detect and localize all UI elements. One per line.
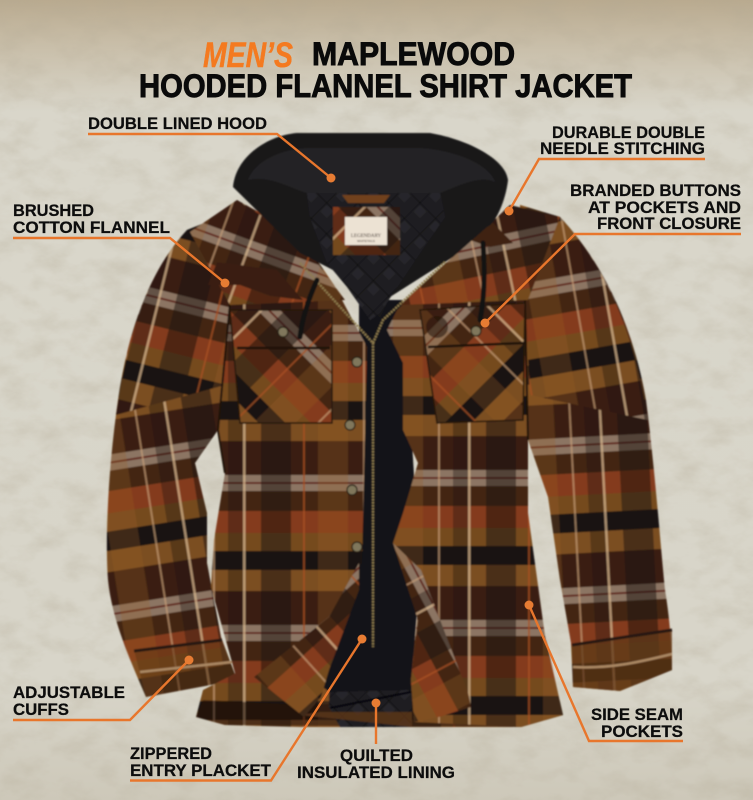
callout: zippered entry placket: ENTRY PLACKET xyxy=(130,761,272,780)
right sleeve xyxy=(520,205,672,691)
callout: adjustable cuffs: ADJUSTABLE xyxy=(13,683,125,702)
collars xyxy=(208,217,513,300)
neck label patch: WHITETAILS xyxy=(357,239,375,243)
callout: double lined hood: DOUBLE LINED HOOD xyxy=(88,114,267,133)
left front panel xyxy=(211,200,367,717)
jacket lower hem xyxy=(196,640,563,727)
right pocket xyxy=(420,303,525,423)
neck label patch xyxy=(333,195,400,255)
callout: durable double needle stitching: DURABLE DOUBLE xyxy=(552,123,705,142)
hood xyxy=(233,133,508,318)
callout: double lined hood xyxy=(88,114,336,182)
callout: adjustable cuffs: CUFFS xyxy=(13,700,69,719)
callout: branded buttons: FRONT CLOSURE xyxy=(597,214,741,233)
neck label patch: LEGENDARY xyxy=(351,234,382,239)
callout: side seam pockets: POCKETS xyxy=(601,722,683,741)
quilted lining xyxy=(307,193,445,320)
callout: quilted insulated lining: INSULATED LINING xyxy=(297,763,455,782)
yoke right xyxy=(400,205,560,305)
callout: branded buttons: BRANDED BUTTONS xyxy=(570,181,741,200)
inner dark panel xyxy=(300,300,420,727)
callout: zippered entry placket: ZIPPERED xyxy=(130,744,212,763)
title xyxy=(139,36,632,104)
callout: side seam pockets xyxy=(524,600,683,741)
title: MEN’S xyxy=(203,36,293,75)
callout: branded buttons: AT POCKETS AND xyxy=(588,198,741,217)
callout: brushed cotton flannel: BRUSHED xyxy=(13,201,94,220)
callout: adjustable cuffs xyxy=(13,656,194,720)
title: HOODED FLANNEL SHIRT JACKET xyxy=(139,68,632,104)
drawstrings xyxy=(300,243,484,337)
callout: zippered entry placket xyxy=(130,634,366,780)
callout: durable double needle stitching xyxy=(504,123,705,216)
callout: brushed cotton flannel: COTTON FLANNEL xyxy=(13,218,170,237)
callout: durable double needle stitching: NEEDLE STITCHING xyxy=(540,139,705,158)
yoke left xyxy=(190,200,345,305)
callout: side seam pockets: SIDE SEAM xyxy=(591,705,683,724)
left pocket xyxy=(230,310,332,423)
right front panel xyxy=(387,205,563,727)
callout: quilted insulated lining: QUILTED xyxy=(340,746,413,765)
callout: brushed cotton flannel xyxy=(13,201,230,288)
callout: quilted insulated lining xyxy=(297,698,455,782)
title: MAPLEWOOD xyxy=(312,36,515,72)
jacket illustration xyxy=(107,133,672,727)
callout: branded buttons xyxy=(480,181,741,328)
left sleeve xyxy=(107,210,237,697)
buttons xyxy=(278,326,481,552)
zipper xyxy=(300,262,445,647)
